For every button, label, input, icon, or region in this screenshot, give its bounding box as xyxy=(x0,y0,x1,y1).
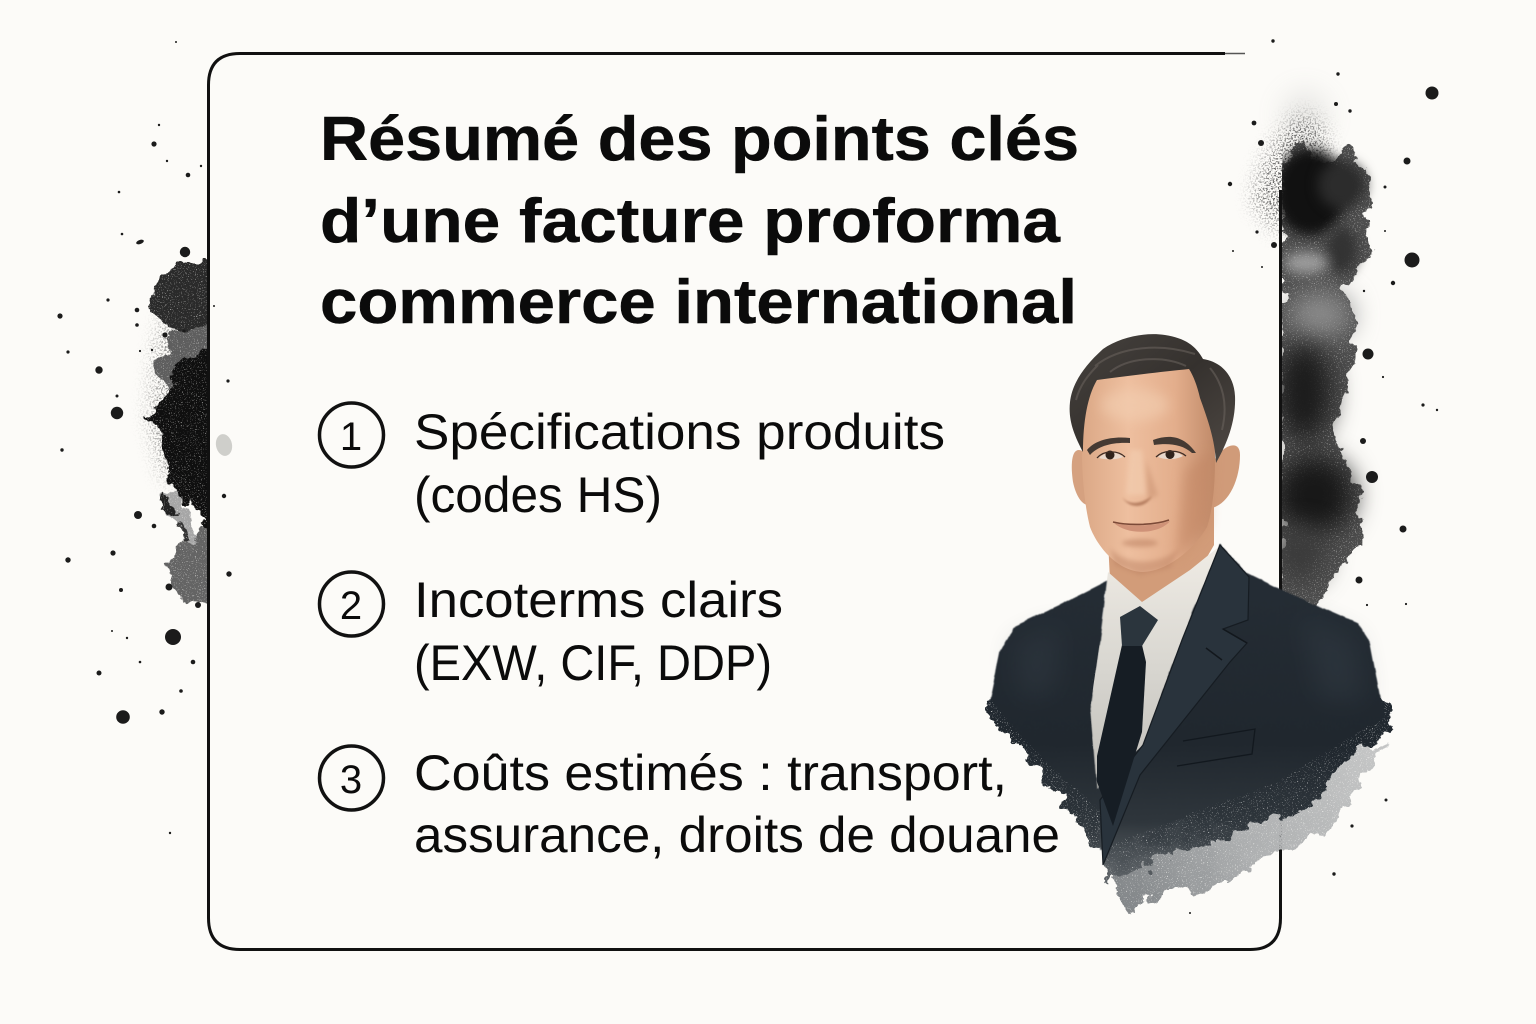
title: d’une facture proforma xyxy=(320,187,1061,256)
ink splash: right side xyxy=(1255,89,1376,606)
number badge 3: 3 xyxy=(340,758,362,802)
list item 1: product specifications: (codes HS) xyxy=(414,467,662,523)
ink splatter dots xyxy=(57,39,1438,914)
dark suit wash xyxy=(990,640,1388,878)
pale suit wash xyxy=(1110,740,1385,912)
right eyebrow xyxy=(1153,437,1196,453)
number badge 2: 2 xyxy=(340,584,362,628)
list item 2: Incoterms: Incoterms clairs xyxy=(414,572,783,628)
lapel notch xyxy=(1206,629,1247,660)
list item 3: estimated costs xyxy=(320,745,1060,863)
list item 1: product specifications: Spécifications produits xyxy=(414,404,945,460)
rounded card frame xyxy=(208,54,1280,950)
tie knot xyxy=(1120,606,1158,646)
hair strands xyxy=(1076,348,1225,430)
left shoulder highlight xyxy=(1015,625,1060,700)
list item 3: estimated costs: Coûts estimés : transport, xyxy=(414,745,1007,801)
forehead light xyxy=(1101,389,1169,421)
number badge 1: 1 xyxy=(340,415,362,459)
pale ink drop xyxy=(214,433,234,457)
face xyxy=(1082,359,1215,572)
number badge 1 xyxy=(320,403,384,467)
list item 3: estimated costs: assurance, droits de douane xyxy=(414,807,1060,863)
right lapel xyxy=(1100,545,1249,865)
neck xyxy=(1108,500,1214,604)
list item 2: Incoterms: (EXW, CIF, DDP) xyxy=(414,635,772,691)
right eye xyxy=(1156,450,1186,459)
under-lip shadow xyxy=(1122,539,1158,547)
mouth xyxy=(1113,520,1170,532)
nose xyxy=(1122,450,1158,506)
title xyxy=(320,105,1079,337)
right ear xyxy=(1212,445,1240,508)
jaw shading xyxy=(1110,548,1180,575)
list item 1: product specifications xyxy=(320,403,945,523)
ink splash: left side xyxy=(144,264,215,606)
number badge 2 xyxy=(320,572,384,636)
number badge 3 xyxy=(320,746,384,810)
right shoulder highlight xyxy=(1300,615,1365,700)
tie xyxy=(1097,645,1146,826)
left eyebrow xyxy=(1087,438,1130,455)
frame top line fading end xyxy=(1225,52,1245,54)
breast pocket xyxy=(1177,729,1255,766)
left eye xyxy=(1097,450,1125,460)
title: commerce international xyxy=(320,268,1077,337)
hair xyxy=(1070,334,1235,463)
title: Résumé des points clés xyxy=(320,105,1079,174)
suit jacket xyxy=(990,544,1384,850)
left ear xyxy=(1072,450,1090,505)
shirt xyxy=(1090,545,1221,790)
cheek shading xyxy=(1175,450,1212,560)
portrait: man in dark suit xyxy=(990,334,1388,912)
list item 2: Incoterms xyxy=(320,572,783,691)
